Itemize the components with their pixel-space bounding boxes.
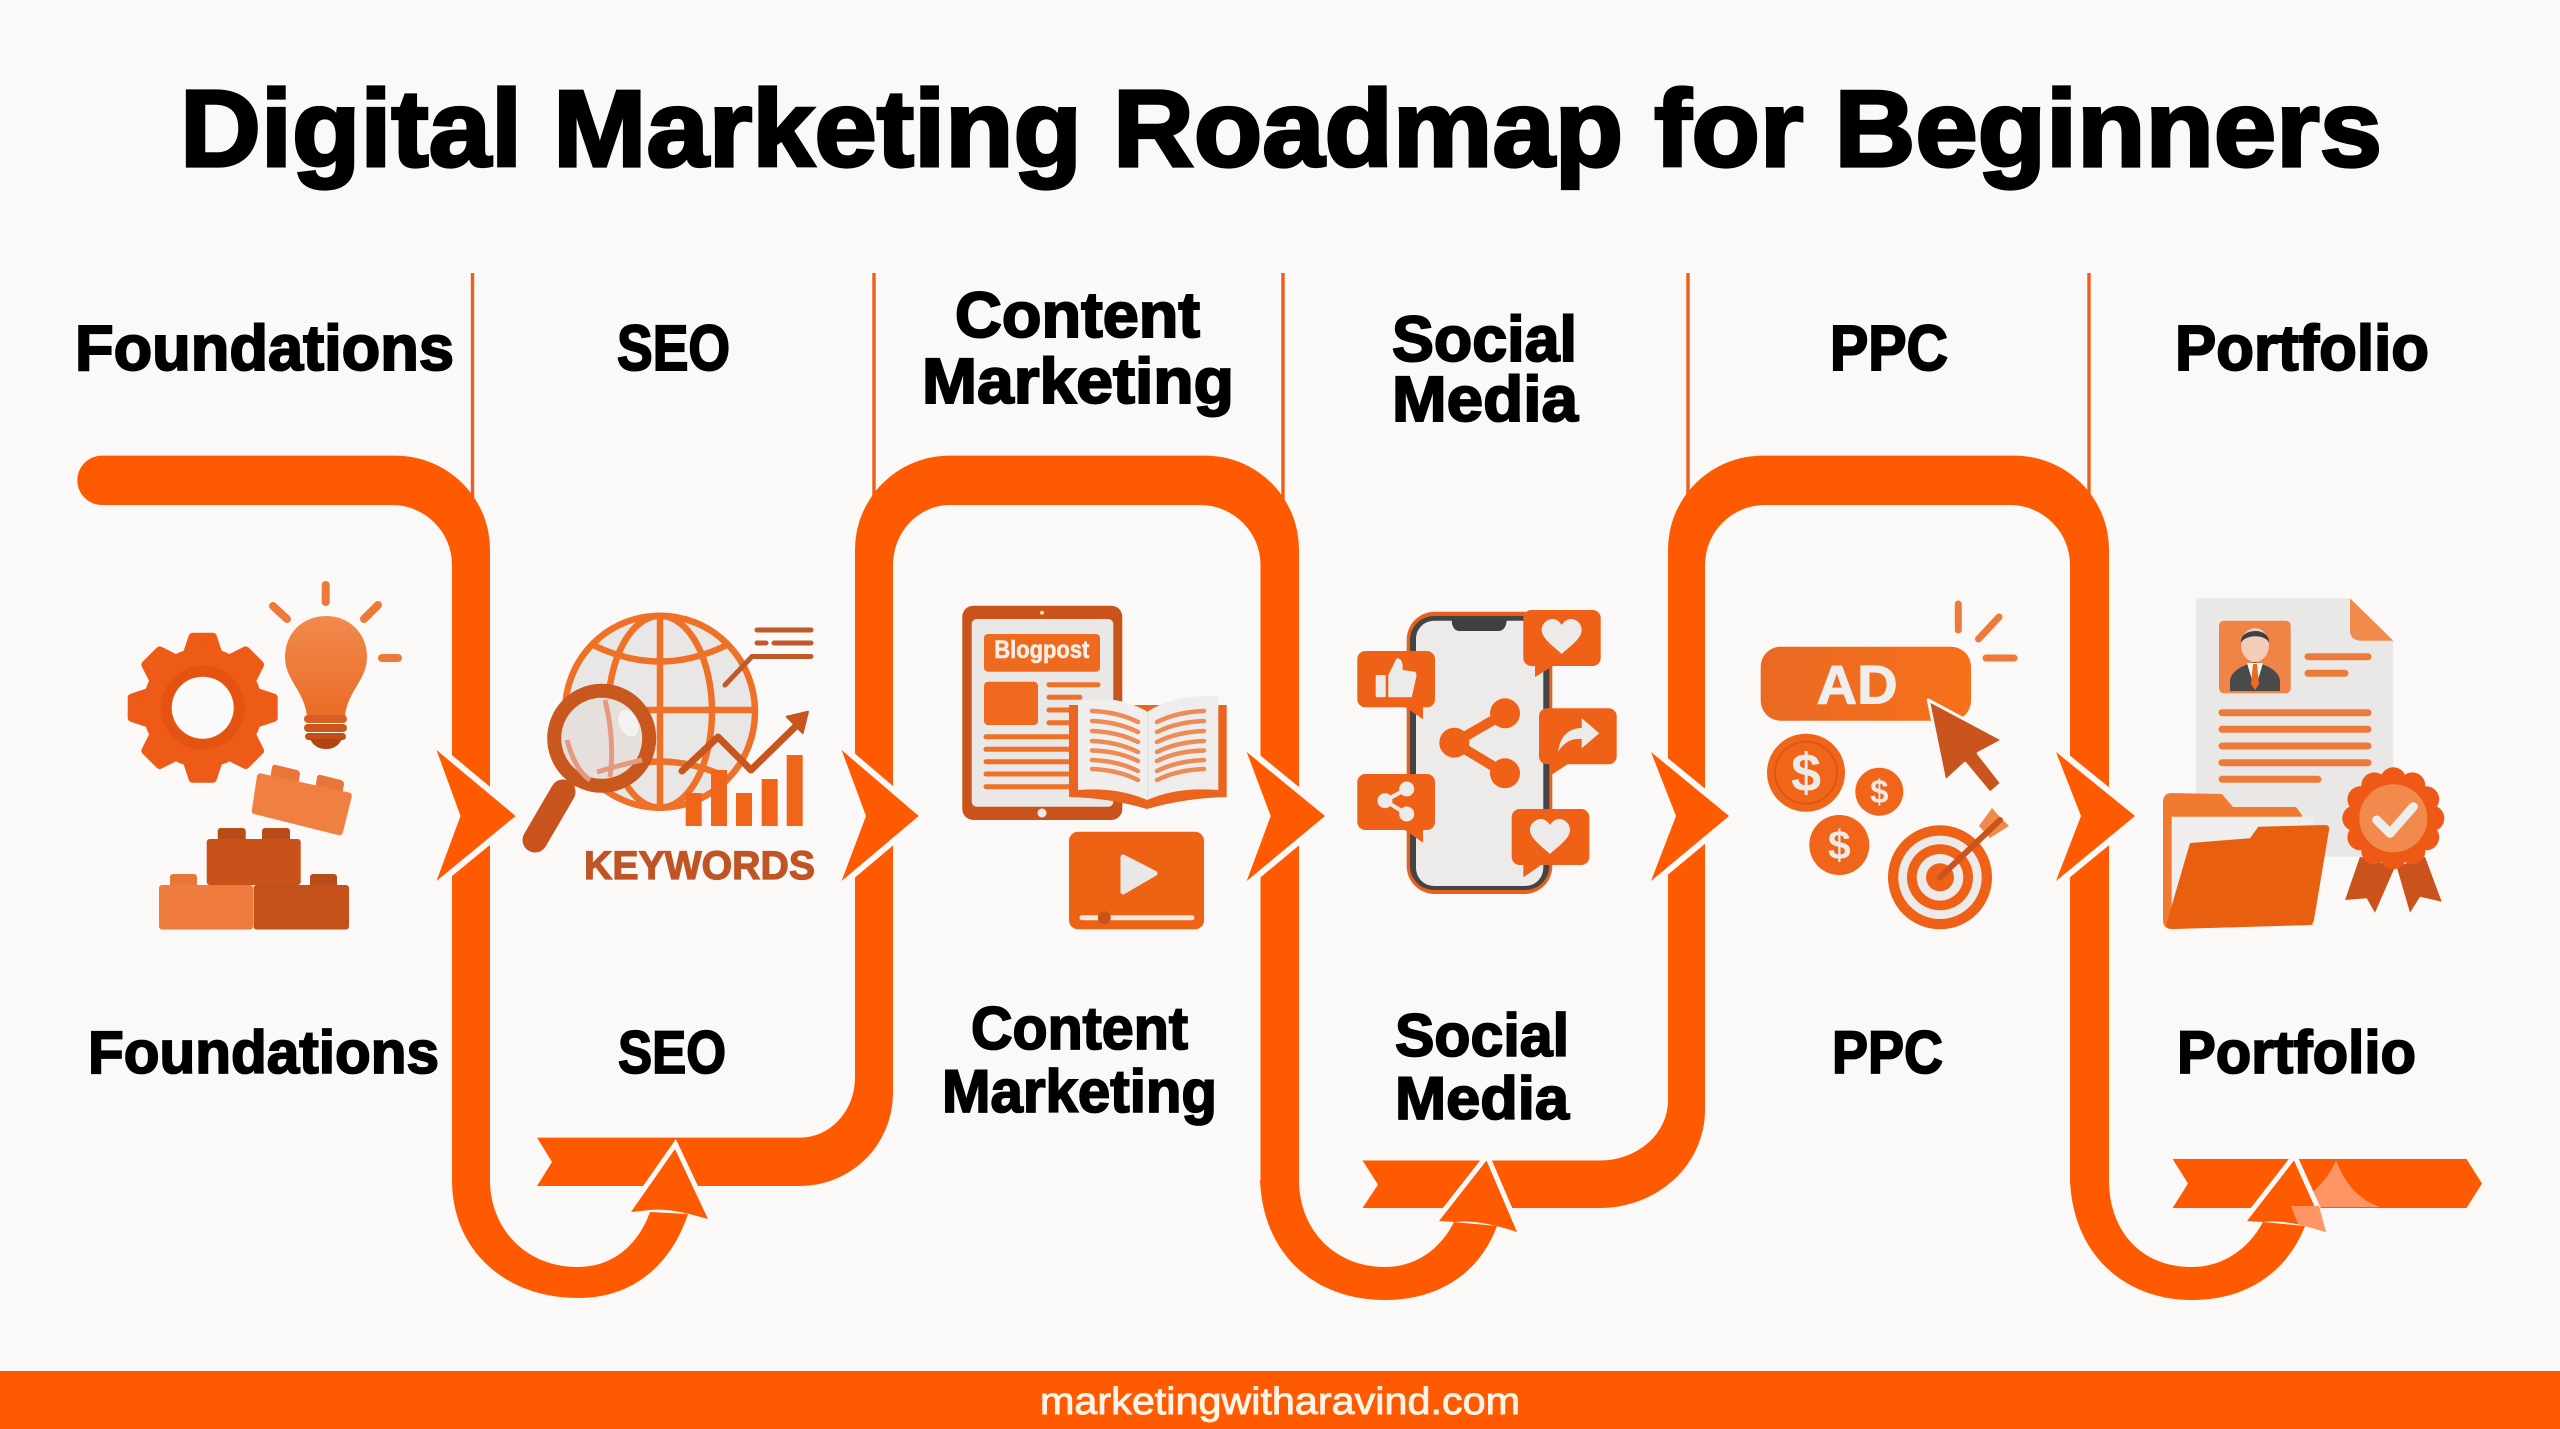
icon: ad button [1761,647,1971,721]
arrow 4 [1651,752,1729,881]
icon: click rays [1958,604,2014,658]
icon: content marketing (tablet, book, video) [962,606,1227,929]
heading: Foundations: Foundations [75,312,454,384]
label: Social Media: Social [1395,1002,1569,1069]
icon: tablet blog post [962,606,1122,820]
icon: gear [128,633,278,783]
icon: SEO (globe, magnifier, chart, keywords) [535,616,815,888]
icon: bar chart [686,755,803,826]
u-turn arrow 1 [452,1149,708,1298]
icon: tablet blog post: Blogpost [994,636,1090,664]
label: Content Marketing [942,995,1217,1125]
bubble: heart top [1523,610,1601,677]
heading: Social Media: Social [1392,303,1577,375]
path segment: arch over PPC [1362,456,2109,1208]
bubble: heart bottom [1512,809,1589,877]
icon: globe [565,616,755,808]
icon: foundations (gear, bulb, bricks) [128,585,398,930]
footer bar [0,1371,2560,1429]
label: Social Media [1395,1002,1570,1132]
icon: folder [2163,793,2329,929]
label: Portfolio: Portfolio [2177,1019,2416,1086]
bubble: share [1357,774,1435,843]
heading: Content Marketing: Content [955,279,1200,351]
icon: target [1888,808,2009,929]
label: PPC: PPC [1832,1019,1943,1086]
icon: coin small: $ [1828,822,1851,868]
lower step labels [88,995,2416,1132]
heading: PPC: PPC [1830,312,1948,384]
chevron arrows [436,750,2135,881]
icon: portfolio (resume, folder, badge) [2163,598,2444,929]
U-turn arrows [452,1149,2326,1300]
icon: coin medium [1855,768,1903,816]
icon: coin large: $ [1791,743,1821,803]
label: Social Media: Media [1395,1065,1570,1132]
bubble: like [1357,651,1435,719]
arrow 3 [1247,752,1325,881]
label: Content Marketing: Marketing [942,1058,1217,1125]
title: Digital Marketing Roadmap for Beginners [180,68,2382,190]
path segment: arch over content marketing [537,456,1299,1186]
heading: SEO: SEO [617,312,730,384]
icon: light bulb [273,585,398,749]
path segment: foundations start [77,456,490,1183]
heading: Social Media [1392,303,1578,435]
icon: falling brick [252,765,352,835]
icon: cursor [1928,700,2003,793]
u-turn arrow 3 [2070,1160,2326,1300]
icon: coin large [1767,734,1845,812]
upper step headings [75,279,2429,435]
arrow 1 [436,750,516,881]
icon: open book [1069,696,1227,809]
heading: Content Marketing: Marketing [922,345,1234,417]
icon: phone [1407,612,1552,894]
icon: magnifying glass [535,691,649,840]
icon: ribbons [2345,857,2442,913]
icon: note lines [725,630,811,685]
roadmap path [77,456,2482,1208]
arrow 2 [842,750,919,881]
icon: video player [1069,832,1204,929]
icon: ad button: AD [1817,653,1898,715]
heading: Social Media: Media [1392,363,1578,435]
icon: stacked bricks [159,828,349,930]
footer url: marketingwitharavind.com [1040,1381,1520,1423]
icon: coin small [1809,815,1869,875]
icon: resume page [2196,598,2393,857]
heading: Portfolio: Portfolio [2175,312,2429,384]
text: keywords: KEYWORDS [584,844,815,888]
icon: trend arrow [682,712,808,771]
icon: social media (phone with bubbles) [1357,610,1617,894]
ribbon highlight [2291,1160,2380,1207]
u-turn arrow 2 [1260,1160,1517,1300]
path segment: final ribbon [2173,1159,2482,1208]
label: SEO: SEO [618,1019,726,1086]
icon: share symbol [1439,698,1520,788]
arrow 5 [2056,752,2135,881]
label: Content Marketing: Content [971,995,1188,1062]
column divider lines [472,273,2089,500]
bubble: forward arrow [1539,708,1617,776]
icon: PPC (ad button, cursor, coins, target) [1761,604,2014,929]
icon: coin medium: $ [1870,773,1888,810]
label: Foundations: Foundations [88,1019,439,1086]
heading: Content Marketing [922,279,1234,417]
icon: award badge [2342,767,2444,869]
